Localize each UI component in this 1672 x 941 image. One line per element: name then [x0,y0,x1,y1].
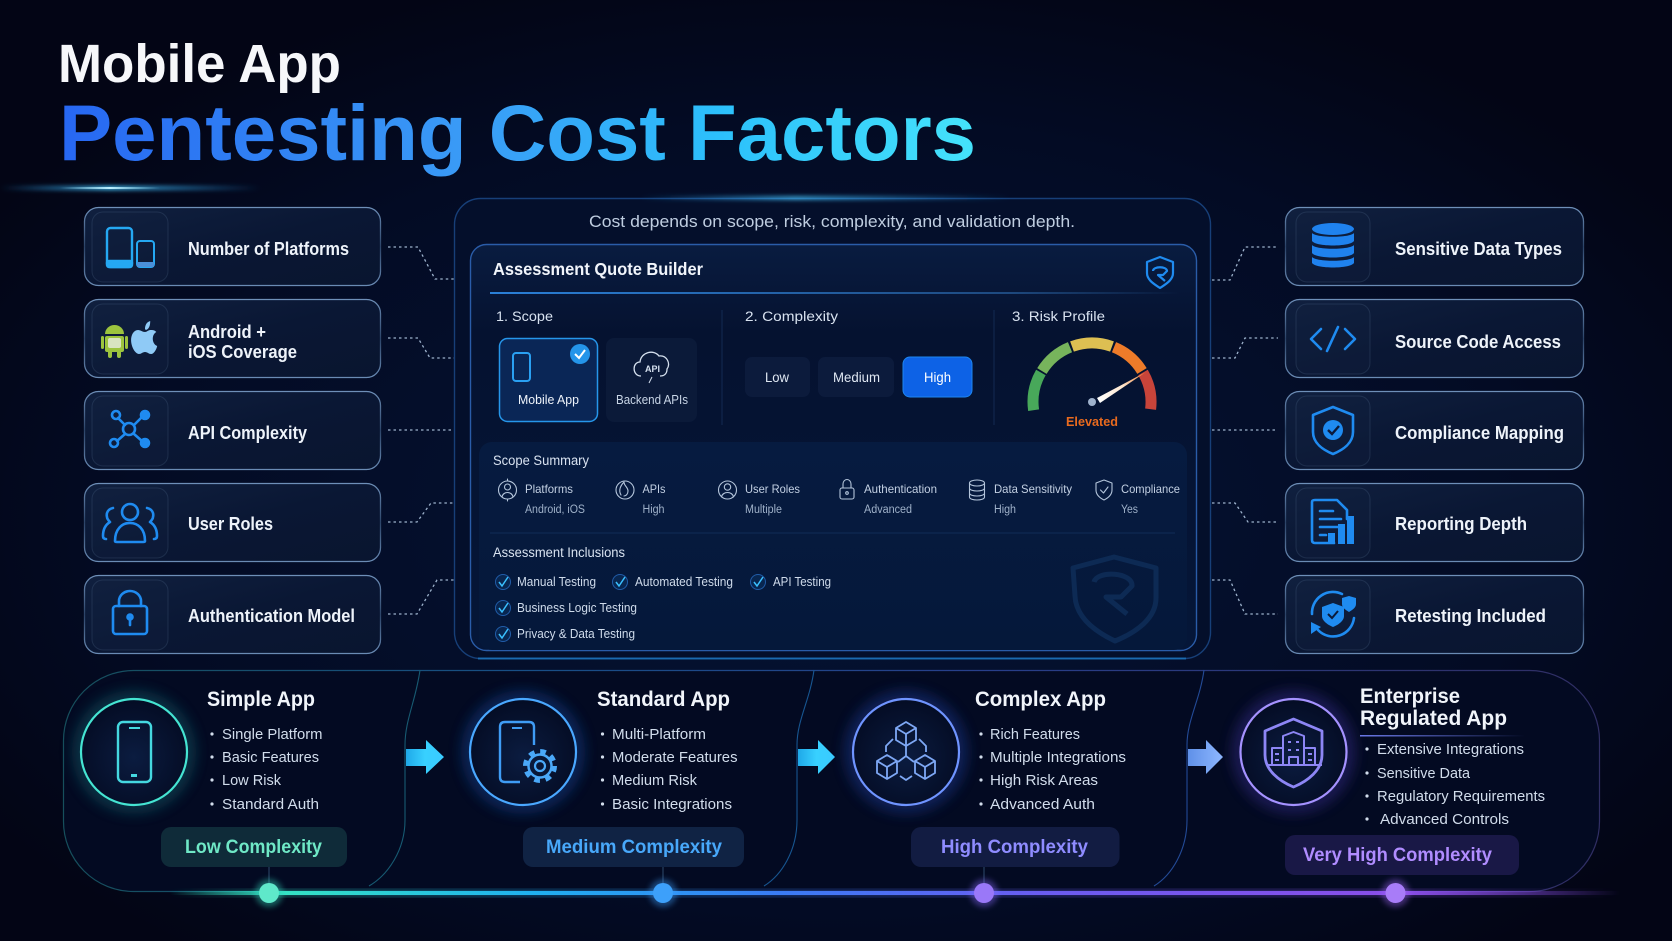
scope summary heading: Scope Summary [493,453,589,468]
tier features: Basic Features [222,749,319,766]
inclusion: API testing: API Testing [773,575,831,589]
card: Retesting Included [1286,576,1584,654]
summary: platforms [498,479,585,516]
tier features: Extensive Integrations [1377,741,1524,758]
stems [269,867,984,884]
summary: APIs: High [642,504,664,516]
milestone: medium [649,879,677,907]
icon: compliance shield [1313,407,1353,454]
icon ring: cubes [844,690,968,814]
heading: Assessment Quote Builder [493,259,703,279]
section: complexity [745,309,972,397]
title glow line [0,186,260,190]
tier separators [369,670,1204,886]
panel: assessment quote builder [470,244,1196,650]
card: Android + iOS Coverage [84,300,380,378]
title line: Mobile App: Mobile App [58,34,341,94]
inclusion: API testing [750,574,831,590]
top glow [640,196,1010,200]
summary: compliance: Compliance [1121,482,1180,496]
tier features: Advanced Controls [1380,811,1509,828]
panel: central container [454,196,1210,660]
tier title: Standard App [597,688,730,711]
label: Sensitive Data Types [1395,238,1562,259]
icon: network nodes [110,411,149,447]
divider [722,310,723,425]
tier features: Standard Auth [222,796,319,813]
tier features: Regulatory Requirements [1377,788,1545,805]
tier features [601,726,738,813]
tier title: Simple App [207,688,315,711]
panel: summary and inclusions [479,442,1187,650]
tier features: High Risk Areas [990,772,1098,789]
icon: report with bars [1312,500,1354,544]
summary: authentication: Authentication [864,482,937,496]
tier features [1365,741,1545,828]
bottom glow [478,658,1186,660]
complexity pill [523,827,744,867]
arrow [1188,740,1223,774]
complexity pill [911,827,1120,867]
label: Reporting Depth [1395,513,1527,534]
button: medium: Medium [833,370,880,385]
tier: enterprise regulated app [1232,685,1545,875]
tier features: Advanced Auth [990,796,1095,813]
complexity pill: High Complexity [941,836,1088,858]
complexity pill [161,827,347,867]
milestone: very high [1382,879,1410,907]
icon ring: phone [72,690,196,814]
tier features: Moderate Features [612,749,738,766]
card: Source Code Access [1286,300,1584,378]
card: Number of Platforms [84,208,380,286]
summary: user roles [718,481,800,516]
tier title: Complex App [975,688,1106,711]
divider [994,310,995,425]
icon: database [1312,223,1354,268]
gauge [1033,343,1151,410]
label: User Roles [188,513,273,534]
label: API Complexity [188,422,308,443]
tier features [979,726,1126,813]
milestone: high [970,879,998,907]
option: backend APIs: API [645,364,660,374]
tier title: Enterprise [1360,685,1460,708]
tier features [210,726,322,813]
icon: users [103,504,157,542]
summary: compliance: Yes [1121,504,1138,516]
icon: padlock [113,591,147,634]
summary: platforms: Android, iOS [525,504,585,516]
option: mobile app selected: Mobile App [518,393,579,407]
inclusion: automated testing: Automated Testing [635,575,733,589]
complexity pill: Low Complexity [185,836,322,858]
tier features: Rich Features [990,726,1080,743]
tier features: Sensitive Data [1377,765,1471,782]
summary: data sensitivity [970,480,1072,516]
icon: android [101,325,128,358]
arrow [798,740,835,774]
tier: standard app [461,688,744,867]
label: Compliance Mapping [1395,422,1564,443]
title [58,34,976,177]
button: high selected [903,357,972,397]
tier features: Low Risk [222,772,281,789]
label: Source Code Access [1395,331,1561,352]
summary divider [490,532,1175,534]
card: Android + iOS Coverage: iOS Coverage [188,341,297,362]
icon: code brackets [1311,327,1355,351]
card: API Complexity [84,392,380,470]
card: Authentication Model [84,576,380,654]
summary: user roles: User Roles [745,482,800,496]
button: high selected: High [924,370,951,385]
button: medium [818,357,894,397]
tier features: Multi-Platform [612,726,706,743]
tier features: Single Platform [222,726,322,743]
timeline [170,867,1620,907]
tier features: Medium Risk [612,772,697,789]
label: Number of Platforms [188,238,349,259]
label: Android + [188,321,266,342]
summary: data sensitivity: High [994,504,1016,516]
summary: compliance [1096,480,1180,516]
complexity pill [1285,835,1519,875]
right dotted connectors [1212,247,1278,614]
inclusion: business logic testing: Business Logic Testing [517,601,637,615]
section heading: 1. Scope [496,309,553,324]
icon: retest cycle [1311,592,1356,636]
arrow [406,740,444,774]
summary: APIs [616,481,666,516]
watermark shield [1073,557,1156,641]
complexity pill: Very High Complexity [1303,844,1492,866]
card: Compliance Mapping [1286,392,1584,470]
needle [1097,372,1146,403]
icon ring: shield with building [1232,690,1356,814]
card: User Roles [84,484,380,562]
tier features: Basic Integrations [612,796,732,813]
card: Sensitive Data Types [1286,208,1584,286]
icon: apple [131,321,157,354]
complexity pill: Medium Complexity [546,836,722,858]
section heading: 3. Risk Profile [1012,309,1105,324]
icon ring: phone with gear [461,690,585,814]
option: backend APIs: Backend APIs [616,393,688,407]
gauge label: Elevated [1066,414,1118,429]
summary: APIs: APIs [642,482,666,496]
right factor cards [1286,208,1584,654]
icon: shield logo [1147,257,1173,288]
inclusion: privacy and data testing: Privacy & Data Testing [517,627,635,641]
label: Authentication Model [188,605,355,626]
button: low: Low [765,370,789,385]
left dotted connectors [388,247,455,614]
summary: authentication [840,480,937,516]
subtitle: Cost depends on scope, risk, complexity, and validation depth. [589,212,1075,231]
assessment inclusions heading: Assessment Inclusions [493,545,625,560]
section: scope [496,309,697,422]
label: Retesting Included [1395,605,1546,626]
inclusion: manual testing: Manual Testing [517,575,596,589]
title underline [1360,735,1525,736]
summary: data sensitivity: Data Sensitivity [994,482,1072,496]
section: risk profile [1012,309,1151,429]
header divider [490,292,1180,294]
tier features: Multiple Integrations [990,749,1126,766]
card: Reporting Depth [1286,484,1584,562]
tier: complex app [844,688,1126,867]
option: mobile app selected [500,338,598,422]
tier: enterprise regulated app: Regulated App [1360,707,1507,730]
icon: tablet and phone [107,228,154,267]
left factor cards [84,208,380,654]
milestone: low [255,879,283,907]
section heading: 2. Complexity [745,309,838,324]
panel: app tiers band [64,670,1600,892]
option: backend APIs [606,338,697,422]
summary: authentication: Advanced [864,504,912,516]
button: low [745,357,810,397]
tier: simple app [72,688,347,867]
title line: Pentesting Cost Factors: Pentesting Cost Factors [59,88,976,177]
summary: user roles: Multiple [745,504,782,516]
summary: platforms: Platforms [525,482,573,496]
